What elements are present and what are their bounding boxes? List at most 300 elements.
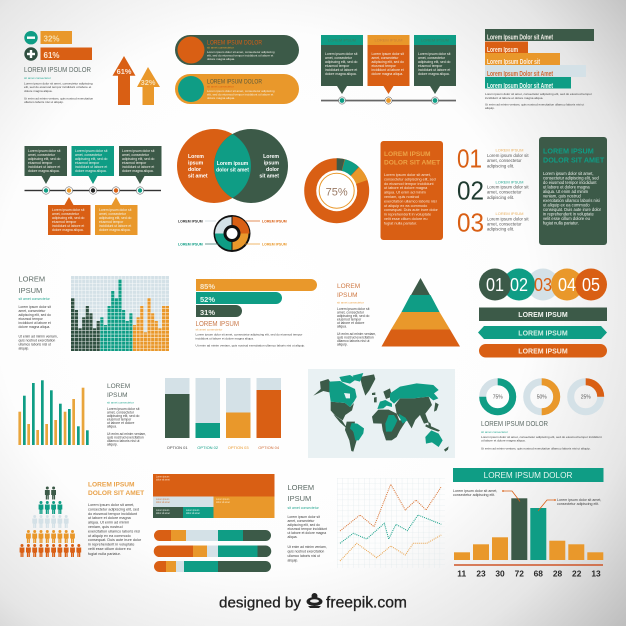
text block: pyramid intro: adipiscing elit, sed do bbox=[337, 314, 370, 318]
numbers: 23 bbox=[476, 568, 486, 578]
text block: line chart intro: LOREM bbox=[288, 483, 314, 492]
text block: bars intro: eiusmod tempor bbox=[107, 418, 132, 422]
text block: bars intro: aliquip. bbox=[107, 442, 118, 446]
box yellow: Lorem ipsum dolor sit bbox=[99, 208, 131, 212]
treemap: Lorem ipsum bbox=[156, 476, 169, 478]
box yellow: amet, consectetur bbox=[99, 212, 127, 216]
item 02: 02 bbox=[457, 176, 484, 206]
text block: pixel chart intro: dolore magna aliqua. bbox=[18, 325, 50, 329]
text block: Lorem ipsum dolor sit amet, consectetur adipiscing elit, sed do eiusmod tempor bbox=[196, 332, 302, 336]
text block: pyramid intro: sit amet consectetur bbox=[337, 300, 364, 304]
box orange: eiusmod tempor bbox=[52, 220, 77, 224]
treemap: Lorem ipsum bbox=[216, 498, 229, 501]
numbered circles bbox=[479, 268, 607, 300]
venn diagram: dolor sit amet bbox=[216, 168, 249, 174]
text block: line chart intro: aliqua. bbox=[288, 535, 298, 539]
text block: line chart intro: eiusmod tempor incididunt bbox=[288, 527, 327, 531]
item 02 bbox=[457, 176, 529, 206]
bar chart: thin bars bbox=[18, 380, 89, 445]
text block: bars intro: Ut enim ad minim veniam, bbox=[107, 432, 146, 436]
dark text panel: ut aliquip ex ea commodo bbox=[543, 202, 590, 208]
pill bar 3 bbox=[154, 561, 271, 572]
box yellow: adipiscing elit, sed do bbox=[99, 216, 132, 220]
item 02: amet, consectetur bbox=[487, 190, 522, 195]
small quadrant donut with labels: LOREM IPSUM bbox=[178, 220, 203, 224]
venn diagram: sit amet bbox=[259, 174, 279, 180]
arrow: 61%: 61% bbox=[117, 67, 132, 76]
box 1: LOREM IPSUM bbox=[328, 38, 356, 42]
donut 50%: 50% bbox=[537, 395, 547, 401]
box 3 bbox=[414, 35, 456, 94]
text block: people: do eiusmod tempor incididunt bbox=[88, 512, 138, 516]
text block: line chart intro bbox=[288, 483, 327, 562]
item 02: adipiscing elit. bbox=[487, 195, 514, 200]
text block: pixel chart intro: IPSUM bbox=[18, 286, 42, 295]
text block: people: aliqua. Ut enim ad minim bbox=[88, 521, 129, 525]
panel: percent bars bbox=[24, 31, 93, 104]
text block: bars intro: sit amet consectetur bbox=[107, 400, 134, 404]
text block: line chart intro: Lorem ipsum dolor sit bbox=[288, 515, 320, 519]
item 03: amet, consectetur bbox=[487, 222, 522, 226]
pixel bar chart bbox=[71, 276, 169, 351]
bar 4: Lorem Ipsum Dolor sit Amet bbox=[487, 71, 553, 78]
orange text panel: ut aliquip ex ea commodo bbox=[384, 204, 427, 208]
dark text panel: do eiusmod tempor incididunt bbox=[543, 180, 597, 185]
box orange bbox=[48, 197, 90, 235]
baseline bbox=[454, 564, 603, 566]
box dark 2: eiusmod tempor bbox=[122, 161, 147, 165]
box yellow: eiusmod tempor bbox=[99, 220, 124, 224]
text block: pyramid intro: ut labore et dolore bbox=[337, 321, 364, 325]
box orange: adipiscing elit, sed do bbox=[52, 216, 85, 220]
box yellow bbox=[95, 197, 138, 235]
small quadrant donut with labels: LOREM IPSUM bbox=[262, 220, 287, 224]
dark text panel: in reprehenderit in voluptate bbox=[543, 212, 594, 216]
text block: bars intro: ut labore et dolore bbox=[107, 421, 134, 425]
box 2: amet, consectetur bbox=[372, 56, 399, 60]
box 3: amet, consectetur bbox=[418, 56, 446, 60]
box 3: LOREM IPSUM bbox=[421, 38, 449, 42]
text block: people: in reprehenderit in voluptate bbox=[88, 543, 134, 547]
box dark 1: Lorem ipsum dolor sit bbox=[28, 149, 60, 153]
orange text panel: exercitation ullamco laboris nisi bbox=[384, 199, 437, 203]
text block: pixel chart intro: aliquip. bbox=[18, 346, 29, 350]
banner orange: LOREM IPSUM bbox=[518, 348, 568, 356]
box dark 1: amet, consectetur bbox=[28, 153, 56, 157]
box 2 bbox=[368, 35, 410, 94]
box orange: Lorem ipsum dolor sit bbox=[52, 208, 84, 212]
row 4 bbox=[26, 530, 75, 543]
panel: stacked label bars bbox=[485, 29, 594, 110]
text block: people: Lorem ipsum dolor sit amet, bbox=[88, 503, 134, 507]
box dark 2: incididunt ut labore et bbox=[122, 165, 154, 169]
orange text panel: fugiat nulla pariatur. bbox=[384, 221, 417, 225]
dark text panel: LOREM IPSUM bbox=[543, 146, 594, 156]
treemap: dolor sit amet bbox=[186, 512, 200, 515]
item 03: adipiscing elit. bbox=[487, 226, 514, 232]
text block: donuts caption bbox=[481, 419, 602, 450]
box 3: dolore magna aliqua. bbox=[418, 72, 450, 76]
pyramid chart bbox=[382, 278, 460, 346]
dark text panel: DOLOR SIT AMET bbox=[543, 156, 605, 164]
box 1: amet, consectetur bbox=[325, 56, 353, 60]
text block: bars intro: aliqua. bbox=[107, 424, 117, 428]
text block: people: ut aliquip ex ea commodo bbox=[88, 534, 131, 538]
text block: bars intro bbox=[107, 383, 146, 446]
bar 2: Lorem Ipsum bbox=[487, 47, 518, 54]
dark text panel: ut labore et dolore magna bbox=[543, 184, 590, 190]
item 01 bbox=[457, 144, 529, 174]
pill dark: dolore magna aliqua. bbox=[207, 57, 235, 61]
banner dark: LOREM IPSUM bbox=[518, 312, 568, 319]
box yellow: incididunt ut labore et bbox=[99, 224, 131, 228]
venn diagram bbox=[177, 129, 288, 203]
numbers bbox=[457, 568, 601, 578]
text block: Ut enim ad minim veniam, quis nostrud exercitation ullamco laboris nisi ut aliquip. bbox=[196, 344, 305, 348]
text block: pixel chart intro: quis nostrud exercitation bbox=[18, 338, 55, 342]
numbered list bbox=[457, 144, 529, 238]
header: LOREM IPSUM DOLOR bbox=[484, 471, 572, 480]
box yellow: dolore magna aliqua. bbox=[99, 228, 131, 232]
box 2: incididunt ut labore et bbox=[372, 68, 404, 72]
world map bbox=[308, 369, 455, 458]
text block: pixel chart intro: Lorem ipsum dolor sit bbox=[18, 305, 51, 309]
dark text panel: aliqua. Ut enim ad minim bbox=[543, 189, 589, 194]
numbered circles: 03 bbox=[534, 275, 552, 295]
timeline line bbox=[24, 187, 161, 194]
callouts: Lorem ipsum dolor sit amet, bbox=[453, 489, 497, 493]
text block: people: velit esse cillum dolore eu bbox=[88, 547, 131, 551]
venn diagram: Lorem bbox=[263, 154, 279, 160]
text block: people: exercitation ullamco laboris nisi bbox=[88, 529, 140, 533]
box 2: eiusmod tempor bbox=[372, 64, 397, 68]
text block: people: consectetur adipiscing elit, sed bbox=[88, 507, 139, 511]
option 01: OPTION 01 bbox=[167, 445, 188, 450]
text block: pyramid intro bbox=[337, 283, 376, 346]
text block: bars intro: amet, consectetur bbox=[107, 410, 135, 414]
pill orange bbox=[175, 74, 299, 104]
text block: pixel chart intro bbox=[18, 274, 58, 350]
text block: line chart intro: quis nostrud exercitation bbox=[288, 550, 324, 554]
text block: sit amet consectetur bbox=[24, 76, 51, 80]
box teal: adipiscing elit, sed do bbox=[75, 157, 108, 161]
text block: Ut enim ad minim veniam, quis nostrud exercitation ullamco laboris nisi ut bbox=[485, 102, 584, 106]
text block: pixel chart intro: ullamco laboris nisi ut bbox=[18, 342, 51, 346]
text block: pixel chart intro: LOREM bbox=[18, 274, 45, 284]
row 3 bbox=[32, 515, 69, 528]
numbers: 11 bbox=[457, 568, 466, 578]
venn diagram: Lorem ipsum bbox=[217, 161, 249, 167]
venn diagram: Lorem bbox=[188, 154, 204, 160]
treemap: dolor sit amet bbox=[216, 501, 230, 504]
option 04: OPTION 04 bbox=[258, 445, 280, 450]
text block: bars intro: adipiscing elit, sed do bbox=[107, 414, 140, 418]
box dark 2: adipiscing elit, sed do bbox=[122, 157, 155, 161]
box 1: eiusmod tempor bbox=[325, 64, 350, 68]
pill orange: sit amet consectetur bbox=[207, 84, 234, 88]
bar 52%: 52% bbox=[200, 295, 215, 304]
box dark 1: incididunt ut labore et bbox=[28, 165, 60, 169]
text block: line chart intro: ullamco laboris nisi ut bbox=[288, 554, 320, 558]
text block: sit amet consectetur bbox=[196, 328, 222, 332]
numbers: 68 bbox=[534, 568, 543, 578]
box dark 1 bbox=[24, 146, 67, 184]
arrows bbox=[112, 56, 160, 105]
column chart with header bbox=[453, 468, 604, 578]
callouts: Lorem ipsum dolor sit amet, bbox=[557, 498, 601, 502]
banners bbox=[478, 308, 607, 358]
text block: line chart intro: aliquip. bbox=[288, 558, 298, 562]
text block: bars intro: ullamco laboris nisi ut bbox=[107, 439, 139, 443]
dark text panel: Lorem ipsum dolor sit amet, bbox=[543, 171, 594, 176]
venn diagram: ipsum bbox=[188, 160, 204, 166]
pill orange: Lorem ipsum dolor sit amet, consectetur adipiscing bbox=[207, 89, 275, 93]
item 01: amet, consectetur bbox=[487, 158, 522, 163]
text block: bars intro: quis nostrud exercitation bbox=[107, 436, 144, 440]
text block: elit, sed do eiusmod tempor incididunt ut labore et bbox=[24, 85, 91, 89]
arrow: 32%: 32% bbox=[141, 78, 156, 87]
text block: people: ut labore et dolore magna bbox=[88, 516, 132, 520]
item 02: Lorem ipsum dolor sit bbox=[487, 184, 529, 190]
panel: pills bbox=[175, 35, 299, 104]
row 1 bbox=[45, 486, 56, 500]
text block: pixel chart intro: incididunt ut labore et bbox=[18, 321, 51, 325]
treemap: Lorem ipsum bbox=[186, 509, 199, 512]
text block: Lorem ipsum dolor sit amet, consectetur adipiscing bbox=[24, 82, 93, 86]
text block: pyramid intro: LOREM bbox=[337, 283, 360, 290]
footer credit: freepik.com bbox=[326, 594, 407, 612]
pill dark: LOREM IPSUM DOLOR bbox=[207, 40, 263, 46]
text block: line chart intro: Ut enim ad minim veniam, bbox=[288, 545, 327, 549]
dark text panel: veniam, quis nostrud bbox=[543, 194, 581, 198]
bar 85%: 85% bbox=[200, 282, 215, 291]
text block: pyramid intro: ullamco laboris nisi ut bbox=[337, 339, 369, 343]
orange text panel: consectetur adipiscing elit, sed bbox=[384, 177, 436, 181]
option 03: OPTION 03 bbox=[228, 445, 249, 450]
numbers: 13 bbox=[591, 568, 601, 578]
rounded percent bars bbox=[196, 279, 317, 348]
text block: pixel chart intro: eiusmod tempor bbox=[18, 317, 44, 321]
text block: pyramid intro: aliquip. bbox=[337, 342, 348, 346]
donut chart 75%: 75% bbox=[326, 186, 348, 198]
box teal: eiusmod tempor bbox=[75, 161, 100, 165]
line chart bbox=[337, 478, 445, 568]
dark text panel bbox=[539, 137, 607, 245]
callouts: consectetur adipiscing elit. bbox=[453, 493, 495, 497]
numbers: 22 bbox=[572, 568, 582, 578]
pill bar 1 bbox=[154, 530, 271, 541]
orange text panel: LOREM IPSUM bbox=[384, 151, 431, 158]
box dark 2: dolore magna aliqua. bbox=[122, 169, 154, 173]
item 03: Lorem ipsum dolor sit bbox=[487, 216, 529, 222]
option columns bbox=[165, 378, 281, 450]
small quadrant donut with labels: LOREM IPSUM bbox=[178, 242, 203, 246]
people pyramid bbox=[20, 486, 81, 557]
box orange: incididunt ut labore et bbox=[52, 224, 84, 228]
bar: 61%: 61% bbox=[44, 51, 60, 60]
box 2: adipiscing elit, sed do bbox=[372, 60, 404, 64]
text block: pyramid intro: aliqua. bbox=[337, 324, 347, 328]
text block: donuts caption: LOREM IPSUM DOLOR bbox=[481, 419, 548, 428]
venn diagram: dolor bbox=[188, 167, 201, 173]
text block: Ut enim ad minim veniam, quis nostrud exercitation bbox=[24, 96, 93, 100]
orange text panel: veniam, quis nostrud bbox=[384, 195, 419, 199]
timeline line bbox=[321, 97, 456, 104]
dark text panel: consectetur adipiscing elit, sed bbox=[543, 176, 599, 180]
text block: people bbox=[88, 482, 144, 556]
treemap: dolor sit amet bbox=[156, 478, 170, 482]
icon: plus bbox=[24, 47, 38, 61]
text block: pixel chart intro: amet, consectetur bbox=[18, 309, 46, 313]
box 2: LOREM IPSUM bbox=[374, 38, 403, 42]
orange text panel: ut labore et dolore magna bbox=[384, 186, 428, 190]
box dark 1: dolore magna aliqua. bbox=[28, 169, 60, 173]
treemap: Lorem ipsum bbox=[156, 509, 169, 512]
numbered circles: 05 bbox=[582, 275, 600, 295]
bar: 32%: 32% bbox=[44, 34, 60, 44]
donut 25%: 25% bbox=[581, 395, 591, 401]
text block bbox=[24, 76, 93, 104]
orange text panel bbox=[380, 141, 443, 240]
orange text panel: consequat. Duis aute irure dolor bbox=[384, 208, 439, 212]
callouts: consectetur adipiscing elit. bbox=[557, 502, 599, 506]
treemap: dolor sit amet bbox=[156, 512, 170, 515]
numbers: 28 bbox=[553, 568, 562, 578]
text block: line chart intro: adipiscing elit, sed do bbox=[288, 523, 320, 527]
venn diagram: sit amet bbox=[188, 174, 208, 180]
box 1: incididunt ut labore et bbox=[325, 68, 357, 72]
treemap: Lorem ipsum bbox=[156, 498, 169, 501]
box dark 1: adipiscing elit, sed do bbox=[28, 157, 61, 161]
callouts bbox=[453, 489, 601, 511]
pill orange: elit, sed do eiusmod tempor incididunt ut labore et bbox=[207, 92, 273, 96]
box 1: dolore magna aliqua. bbox=[325, 72, 357, 76]
pill dark: sit amet consectetur bbox=[207, 46, 234, 50]
box orange: dolore magna aliqua. bbox=[52, 228, 84, 232]
banner teal: LOREM IPSUM bbox=[518, 330, 568, 338]
bar 3: Lorem Ipsum Dolor sit bbox=[487, 59, 540, 66]
bar 5: Lorem Ipsum Dolor sit Amet bbox=[487, 83, 553, 90]
text block: ullamco laboris nisi ut aliquip. bbox=[24, 100, 64, 104]
header bbox=[453, 468, 604, 482]
venn diagram: dolor bbox=[266, 167, 279, 173]
venn diagram: ipsum bbox=[264, 160, 279, 166]
box teal: dolore magna aliqua. bbox=[75, 169, 107, 173]
small quadrant donut with labels bbox=[178, 215, 287, 252]
text block: people: consequat. Duis aute irure dolor bbox=[88, 538, 142, 542]
treemap: dolor sit amet bbox=[156, 501, 170, 504]
orange text panel: aliqua. Ut enim ad minim bbox=[384, 191, 426, 195]
text block: bars intro: Lorem ipsum dolor sit bbox=[107, 407, 139, 411]
text block: pyramid intro: amet, consectetur bbox=[337, 310, 365, 314]
text block: line chart intro: sit amet consectetur bbox=[288, 506, 320, 510]
text block: line chart intro: ut labore et dolore magna bbox=[288, 531, 326, 535]
dark text panel: velit esse cillum dolore eu bbox=[543, 216, 590, 221]
orange text panel: do eiusmod tempor incididunt bbox=[384, 182, 435, 186]
dark text panel: consequat. Duis aute irure dolor bbox=[543, 207, 602, 212]
item 01: adipiscing elit. bbox=[487, 164, 514, 168]
orange text panel: DOLOR SIT AMET bbox=[384, 160, 440, 166]
text block: pyramid intro: eiusmod tempor bbox=[337, 318, 362, 322]
item 03: 03 bbox=[457, 208, 484, 238]
numbers: 72 bbox=[515, 568, 524, 578]
text block: line chart intro: amet, consectetur bbox=[288, 519, 315, 523]
dark text panel: fugiat nulla pariatur. bbox=[543, 220, 579, 226]
numbered circles: 01 bbox=[486, 275, 504, 295]
treemap bbox=[153, 474, 274, 518]
pill dark: elit, sed do eiusmod tempor incididunt ut labore et bbox=[207, 54, 273, 58]
pill dark: Lorem ipsum dolor sit amet, consectetur adipiscing bbox=[207, 50, 275, 54]
text block: pixel chart intro: adipiscing elit, sed do bbox=[18, 313, 51, 317]
box 3: adipiscing elit, sed do bbox=[418, 60, 451, 64]
numbers: 30 bbox=[495, 568, 505, 578]
small donuts bbox=[483, 382, 601, 412]
footer credit: designed by bbox=[219, 594, 301, 612]
box orange: amet, consectetur bbox=[52, 212, 80, 216]
donut chart 75% bbox=[310, 164, 363, 217]
columns bbox=[454, 498, 603, 560]
box teal: Lorem ipsum dolor sit bbox=[75, 149, 107, 153]
text block: bars intro: LOREM bbox=[107, 383, 130, 390]
row 5 bbox=[20, 544, 81, 557]
text block: donuts caption: Ut enim ad minim veniam, quis nostrud exercitation ullamco laboris nisi ut aliquip. bbox=[481, 446, 591, 450]
text block: people: veniam, quis nostrud bbox=[88, 525, 123, 529]
box 1: Lorem ipsum dolor sit bbox=[325, 52, 357, 56]
bar 1: Lorem Ipsum Dolor sit Amet bbox=[487, 35, 553, 42]
text block: bars intro: IPSUM bbox=[107, 392, 128, 399]
box 3: eiusmod tempor bbox=[418, 64, 443, 68]
panel: timeline three boxes bbox=[321, 35, 456, 104]
text block: people: LOREM IPSUM bbox=[88, 482, 135, 489]
bar 31%: 31% bbox=[200, 308, 215, 317]
text block: pixel chart intro: sit amet consectetur bbox=[18, 297, 51, 301]
box 3: Lorem ipsum dolor sit bbox=[418, 52, 450, 56]
text block: dolore magna aliqua. bbox=[24, 89, 53, 93]
box teal bbox=[72, 146, 114, 184]
text block: incididunt ut labore et dolore magna aliqua. bbox=[196, 336, 254, 340]
text block: Lorem ipsum dolor sit amet, consectetur adipiscing elit, sed do eiusmod tempor bbox=[485, 92, 592, 96]
text block: line chart intro: IPSUM bbox=[288, 494, 311, 503]
box 2: dolore magna aliqua. bbox=[372, 72, 403, 76]
box dark 2: Lorem ipsum dolor sit bbox=[122, 149, 154, 153]
row 2 bbox=[39, 501, 62, 514]
pill dark bbox=[175, 35, 299, 65]
item 02: LOREM IPSUM bbox=[495, 180, 524, 184]
icon: freepik mascot bbox=[306, 593, 322, 608]
box 1 bbox=[321, 35, 363, 94]
text block: pyramid intro: IPSUM bbox=[337, 292, 358, 299]
pill orange: LOREM IPSUM DOLOR bbox=[207, 80, 263, 86]
orange text panel: Lorem ipsum dolor sit amet, bbox=[384, 173, 431, 177]
text block: people: DOLOR SIT AMET bbox=[88, 490, 144, 497]
orange text panel: velit esse cillum dolore eu bbox=[384, 217, 427, 221]
box teal: amet, consectetur bbox=[75, 153, 103, 157]
text block: pyramid intro: Lorem ipsum dolor sit bbox=[337, 307, 369, 311]
text block: incididunt ut labore et dolore magna aliqua. bbox=[485, 96, 543, 100]
dark text panel: exercitation ullamco laboris nisi bbox=[543, 198, 600, 203]
heading: LOREM IPSUM DOLOR bbox=[24, 65, 91, 74]
pill orange: dolore magna aliqua. bbox=[207, 96, 235, 100]
text block: pyramid intro: quis nostrud exercitation bbox=[337, 336, 374, 340]
pill bar 2 bbox=[154, 546, 271, 557]
heading: LOREM IPSUM bbox=[196, 319, 239, 328]
text block: donuts caption: Lorem ipsum dolor sit amet, consectetur adipiscing elit, sed do eiusmod tempor incididunt bbox=[481, 435, 602, 439]
small quadrant donut with labels: LOREM IPSUM bbox=[262, 242, 287, 246]
numbered circles: 04 bbox=[558, 275, 576, 295]
text block: aliquip. bbox=[485, 106, 495, 110]
box teal: incididunt ut labore et bbox=[75, 165, 107, 169]
text block bbox=[196, 328, 305, 348]
